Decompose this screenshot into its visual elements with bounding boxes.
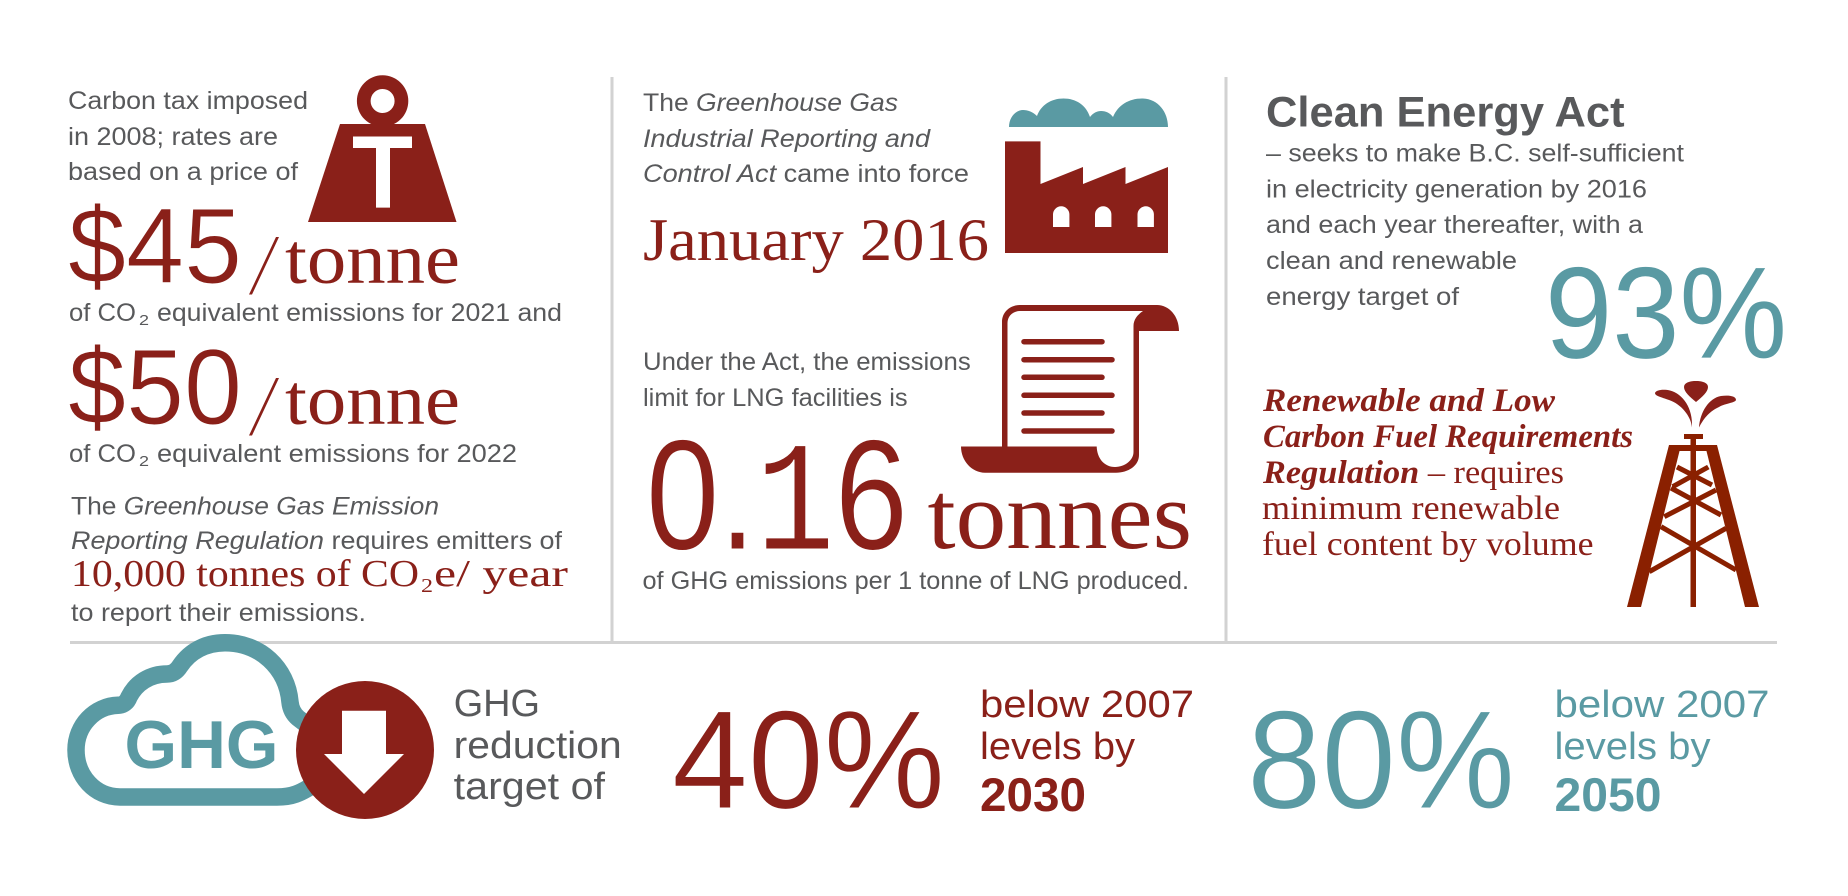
stat: 0.16 tonnes: tonnes [928,462,1192,569]
text: reporting regulation: to report their emissions. [71,599,366,627]
text: low carbon fuel regulation: Regulation – requires [1262,455,1564,491]
panel: clean energy act [1262,88,1787,607]
icon: document scroll [961,305,1179,473]
icon: GHG cloud with down arrow [76,643,434,819]
text: carbon tax intro: Carbon tax imposed [68,87,308,115]
text: 2021 emissions note: 2 [139,312,149,329]
stat: 80% by 2050: 2050 [1554,768,1662,821]
text: low carbon fuel regulation: Carbon Fuel Requirements [1263,419,1633,455]
text: carbon tax intro: in 2008; rates are [68,123,278,151]
text: GHG reduction target of: reduction [454,725,622,767]
stat: $45 per tonne: tonne [285,219,460,299]
panel: industrial reporting act [642,89,1192,597]
text: act intro: The Greenhouse Gas [643,89,898,117]
text: clean energy description: and each year thereafter, with a [1266,211,1643,239]
stat: 80% by 2050: below 2007 [1554,684,1770,726]
stat: 40% by 2030 [672,681,1194,838]
text: act intro [643,89,969,188]
text: low carbon fuel regulation [1262,383,1633,563]
text: reporting regulation: 2 [421,575,433,597]
panel: GHG reduction targets [76,643,1770,838]
text: low carbon fuel regulation: minimum renewable [1262,490,1560,527]
stat: $45 per tonne [68,185,460,306]
text: 2022 emissions note: 2 [139,453,149,470]
text: per tonne of LNG: of GHG emissions per 1 tonne of LNG produced. [642,567,1189,595]
icon: GHG cloud with down arrow: GHG [124,707,278,783]
stat: $50 per tonne: $50 [68,326,242,447]
icon: oil derrick [1627,381,1759,607]
text: clean energy description: energy target of [1266,283,1459,311]
stat: 40% by 2030: 40% [672,681,945,838]
icon: factory with clouds [1005,98,1168,253]
text: act intro: Industrial Reporting and [643,125,931,153]
text: reporting regulation: e/ year [434,553,568,595]
text: carbon tax intro: based on a price of [68,158,298,186]
stat: $45 per tonne: $45 [68,185,242,306]
text: GHG reduction target of: GHG [454,683,540,725]
text: clean energy description: – seeks to make B.C. self-sufficient [1266,140,1684,168]
heading: Clean Energy Act: Clean Energy Act [1266,88,1625,136]
text: carbon tax intro [68,87,308,186]
text: reporting regulation: Reporting Regulation requires emitters of [71,527,562,555]
panel: carbon tax [68,75,568,627]
text: LNG limit [643,348,971,412]
text: low carbon fuel regulation: Renewable and Low [1262,383,1556,419]
text: GHG reduction target of [454,683,622,808]
text: LNG limit: limit for LNG facilities is [643,384,908,412]
stat: 0.16 tonnes [646,408,1192,597]
icon: tonne weight [308,75,456,222]
stat: 40% by 2030: below 2007 [980,684,1194,726]
date: January 2016: January 2016 [643,207,989,273]
text: 2022 emissions note: of CO [69,440,136,468]
text: reporting regulation: 10,000 tonnes of CO [71,553,419,595]
text: 2021 emissions note: of CO [69,299,136,327]
stat: 80% by 2050: 80% [1247,681,1515,838]
text: reporting regulation [71,492,568,627]
text: act intro: Control Act came into force [643,160,969,188]
stat: 93%: 93% [1545,240,1787,386]
text: 2022 emissions note: equivalent emissions for 2022 [157,440,517,468]
stat: 80% by 2050 [1247,681,1770,838]
text: clean energy description [1266,140,1684,311]
text: 2022 emissions note [69,440,517,470]
text: 2021 emissions note: equivalent emissions for 2021 and [157,299,562,327]
stat: 40% by 2030: 2030 [980,768,1086,821]
text: clean energy description: clean and renewable [1266,247,1517,275]
stat: 40% by 2030: levels by [980,726,1135,768]
stat: $50 per tonne: tonne [285,360,460,440]
text: clean energy description: in electricity generation by 2016 [1266,176,1647,204]
text: reporting regulation: The Greenhouse Gas Emission [71,492,439,520]
stat: $50 per tonne [68,326,460,447]
stat: 80% by 2050: levels by [1554,726,1710,768]
text: GHG reduction target of: target of [454,766,605,808]
text: LNG limit: Under the Act, the emissions [643,348,971,376]
text: low carbon fuel regulation: fuel content by volume [1262,526,1594,563]
stat: 0.16 tonnes: 0.16 [646,408,908,597]
